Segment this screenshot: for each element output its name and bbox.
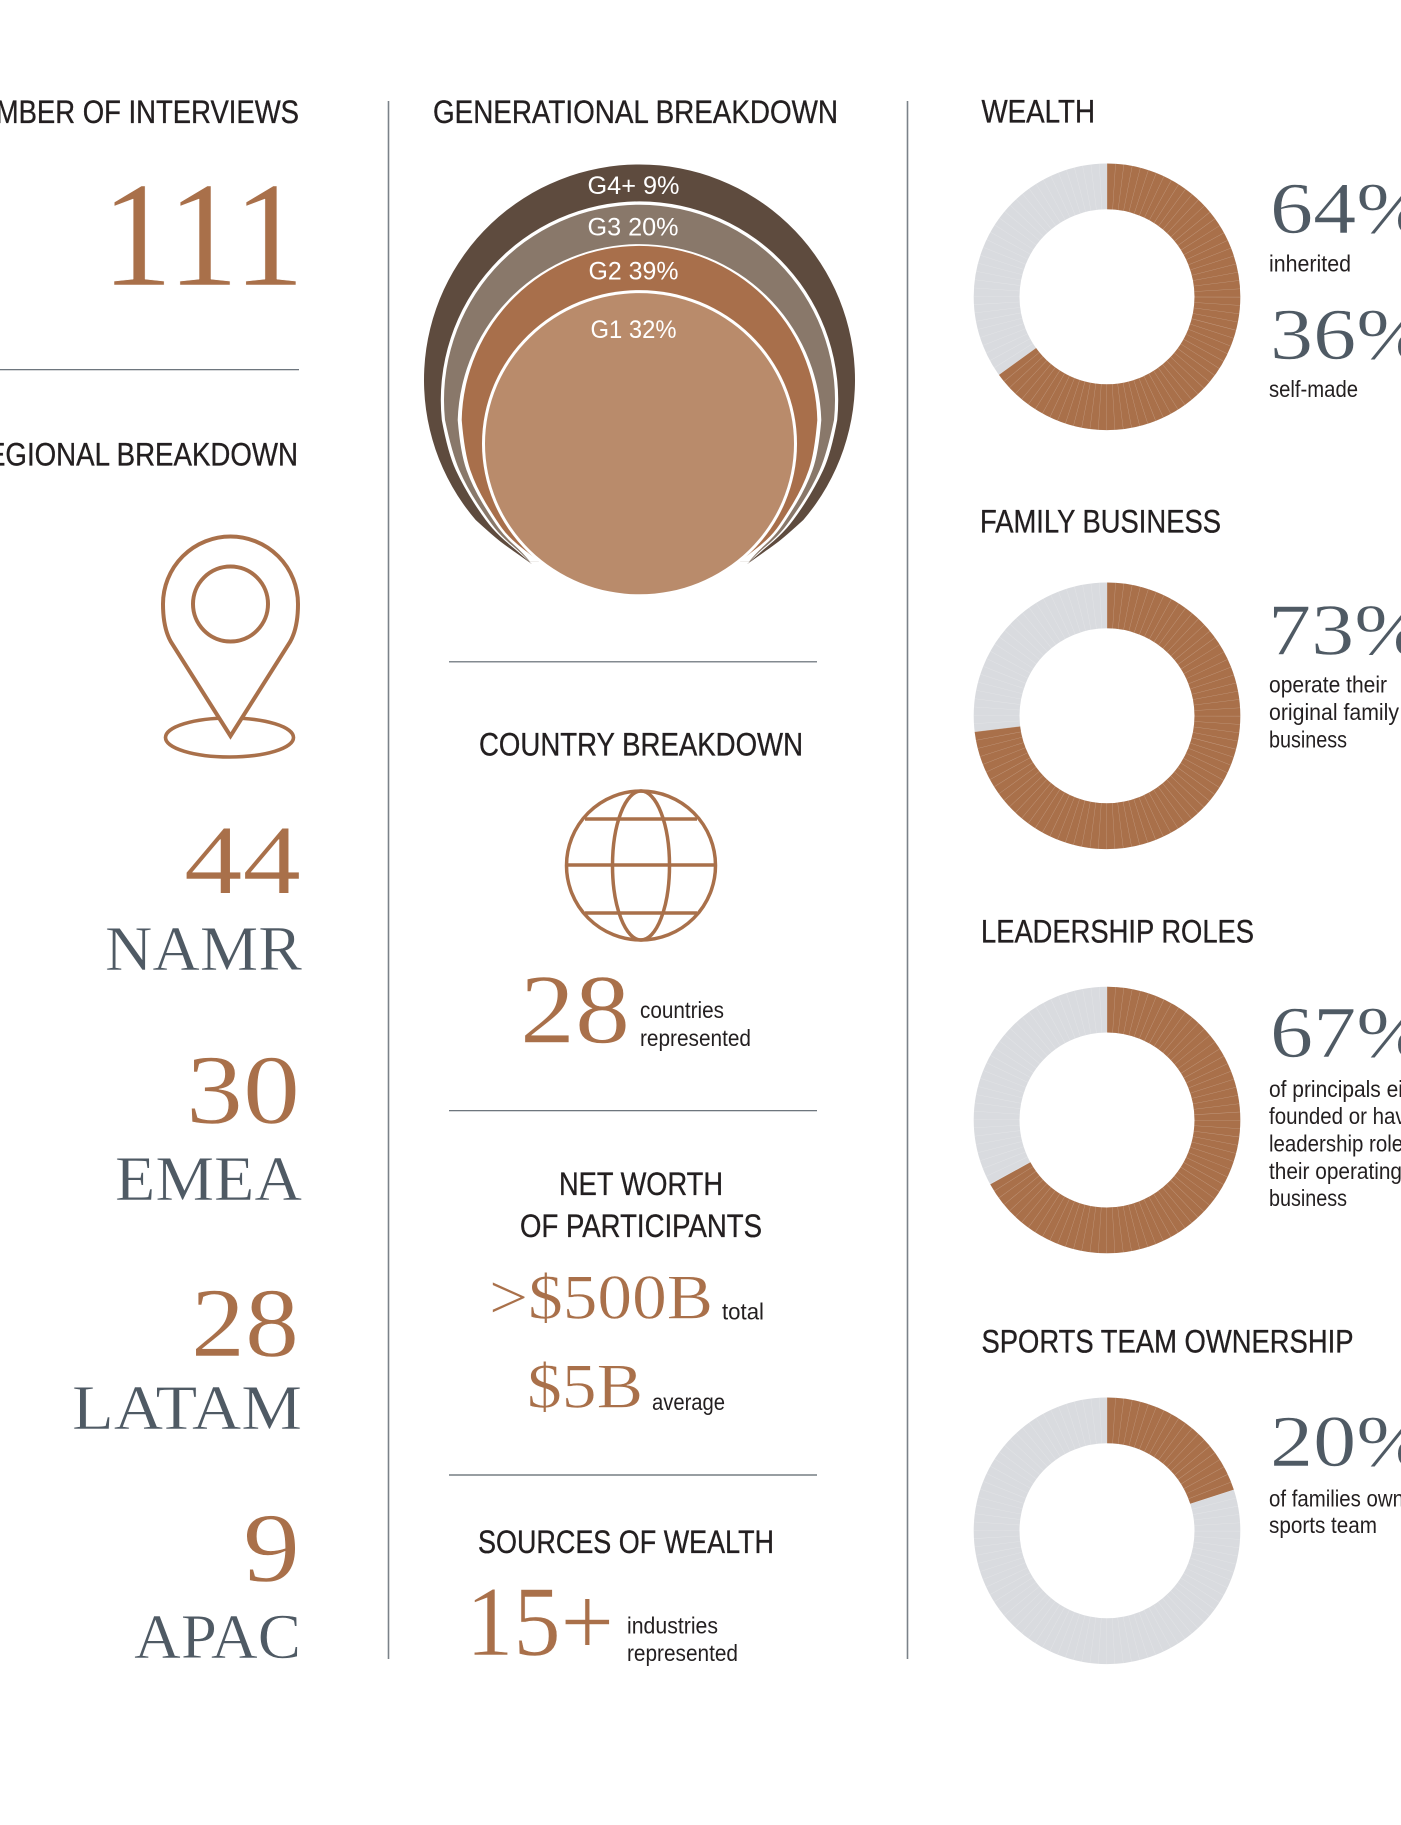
text: industries represented: represented — [627, 1640, 738, 1666]
label: G1: G1 32% — [590, 316, 676, 344]
panel: leadership roles — [981, 914, 1401, 1230]
text: countries represented — [640, 997, 751, 1051]
stat: NAMR 44: NAMR — [105, 914, 302, 984]
stat: NAMR 44: 44 — [184, 806, 301, 915]
stat: total net worth: >$500B — [489, 1262, 713, 1332]
stat: LATAM 28: LATAM — [72, 1373, 302, 1443]
stat: APAC 9: APAC — [134, 1602, 301, 1672]
panel: sources of wealth — [466, 1524, 774, 1677]
stat: 36% self-made: 36% — [1270, 294, 1401, 375]
panel: generational breakdown — [424, 94, 855, 597]
icon: location pin — [163, 536, 298, 757]
stat: APAC 9 — [134, 1494, 301, 1672]
stat: 67%: business — [1269, 1185, 1347, 1211]
chart: wealth donut — [997, 186, 1217, 407]
heading: leadership roles: LEADERSHIP ROLES — [981, 914, 1254, 950]
label: G2: G2 39% — [588, 258, 678, 286]
stat: LATAM 28: 28 — [191, 1269, 299, 1378]
number: 15+: 15+ — [466, 1566, 614, 1677]
panel: family business — [980, 503, 1401, 826]
stat: 64% inherited: inherited — [1269, 251, 1351, 277]
stat: average net worth — [527, 1350, 725, 1422]
stat: NAMR 44 — [105, 806, 302, 984]
heading: generational breakdown: GENERATIONAL BREAKDOWN — [433, 94, 838, 130]
text: industries represented: industries — [627, 1612, 718, 1638]
chart: nested generation circles — [424, 164, 855, 597]
icon: globe — [566, 791, 716, 940]
stat: 20%: sports team — [1269, 1512, 1377, 1538]
stat: 67% — [1269, 992, 1401, 1211]
stat: 20% — [1269, 1401, 1401, 1538]
label: G3: G3 20% — [588, 214, 678, 242]
stat: 67%: 67% — [1270, 992, 1401, 1073]
stat: 73%: business — [1269, 727, 1347, 753]
heading: wealth: WEALTH — [982, 94, 1095, 130]
stat: 20%: 20% — [1270, 1401, 1401, 1482]
heading: sources of wealth: SOURCES OF WEALTH — [478, 1524, 774, 1560]
number: 111: 111 — [102, 152, 304, 318]
stat: average net worth: $5B — [527, 1350, 643, 1422]
heading: net worth: OF PARTICIPANTS — [520, 1208, 762, 1244]
heading: net worth — [520, 1166, 762, 1244]
stat: 64% inherited: 64% — [1270, 168, 1401, 249]
stat: 73%: operate their — [1269, 672, 1387, 698]
panel: sports team ownership — [982, 1324, 1401, 1641]
stat: EMEA 30: EMEA — [115, 1144, 303, 1214]
stat: APAC 9: 9 — [243, 1494, 300, 1603]
text: industries represented — [627, 1612, 738, 1666]
panel: regional breakdown — [0, 436, 303, 1672]
panel: number of interviews — [0, 94, 304, 318]
stat: EMEA 30 — [115, 1036, 303, 1214]
stat: average net worth: average — [652, 1389, 725, 1415]
number: 28 countries: 28 — [520, 956, 630, 1064]
chart: family business donut — [997, 605, 1217, 826]
heading: family business: FAMILY BUSINESS — [980, 503, 1221, 539]
panel: country breakdown — [479, 726, 803, 1064]
heading: country breakdown: COUNTRY BREAKDOWN — [479, 726, 803, 762]
stat: total net worth: total — [722, 1298, 764, 1324]
stat: 36% self-made: self-made — [1269, 376, 1358, 402]
heading: net worth: NET WORTH — [559, 1166, 723, 1202]
chart: leadership donut — [997, 1010, 1217, 1230]
panel: net worth of participants — [489, 1166, 764, 1422]
text: countries represented: countries — [640, 997, 724, 1023]
label: G4+: G4+ 9% — [588, 172, 680, 200]
text: countries represented: represented — [640, 1025, 751, 1051]
panel: wealth — [982, 94, 1401, 407]
stat: 73%: 73% — [1268, 590, 1401, 671]
chart: sports team donut — [997, 1420, 1217, 1641]
stat: 73% — [1268, 590, 1401, 753]
stat: LATAM 28 — [72, 1269, 302, 1443]
stat: EMEA 30: 30 — [186, 1036, 300, 1145]
